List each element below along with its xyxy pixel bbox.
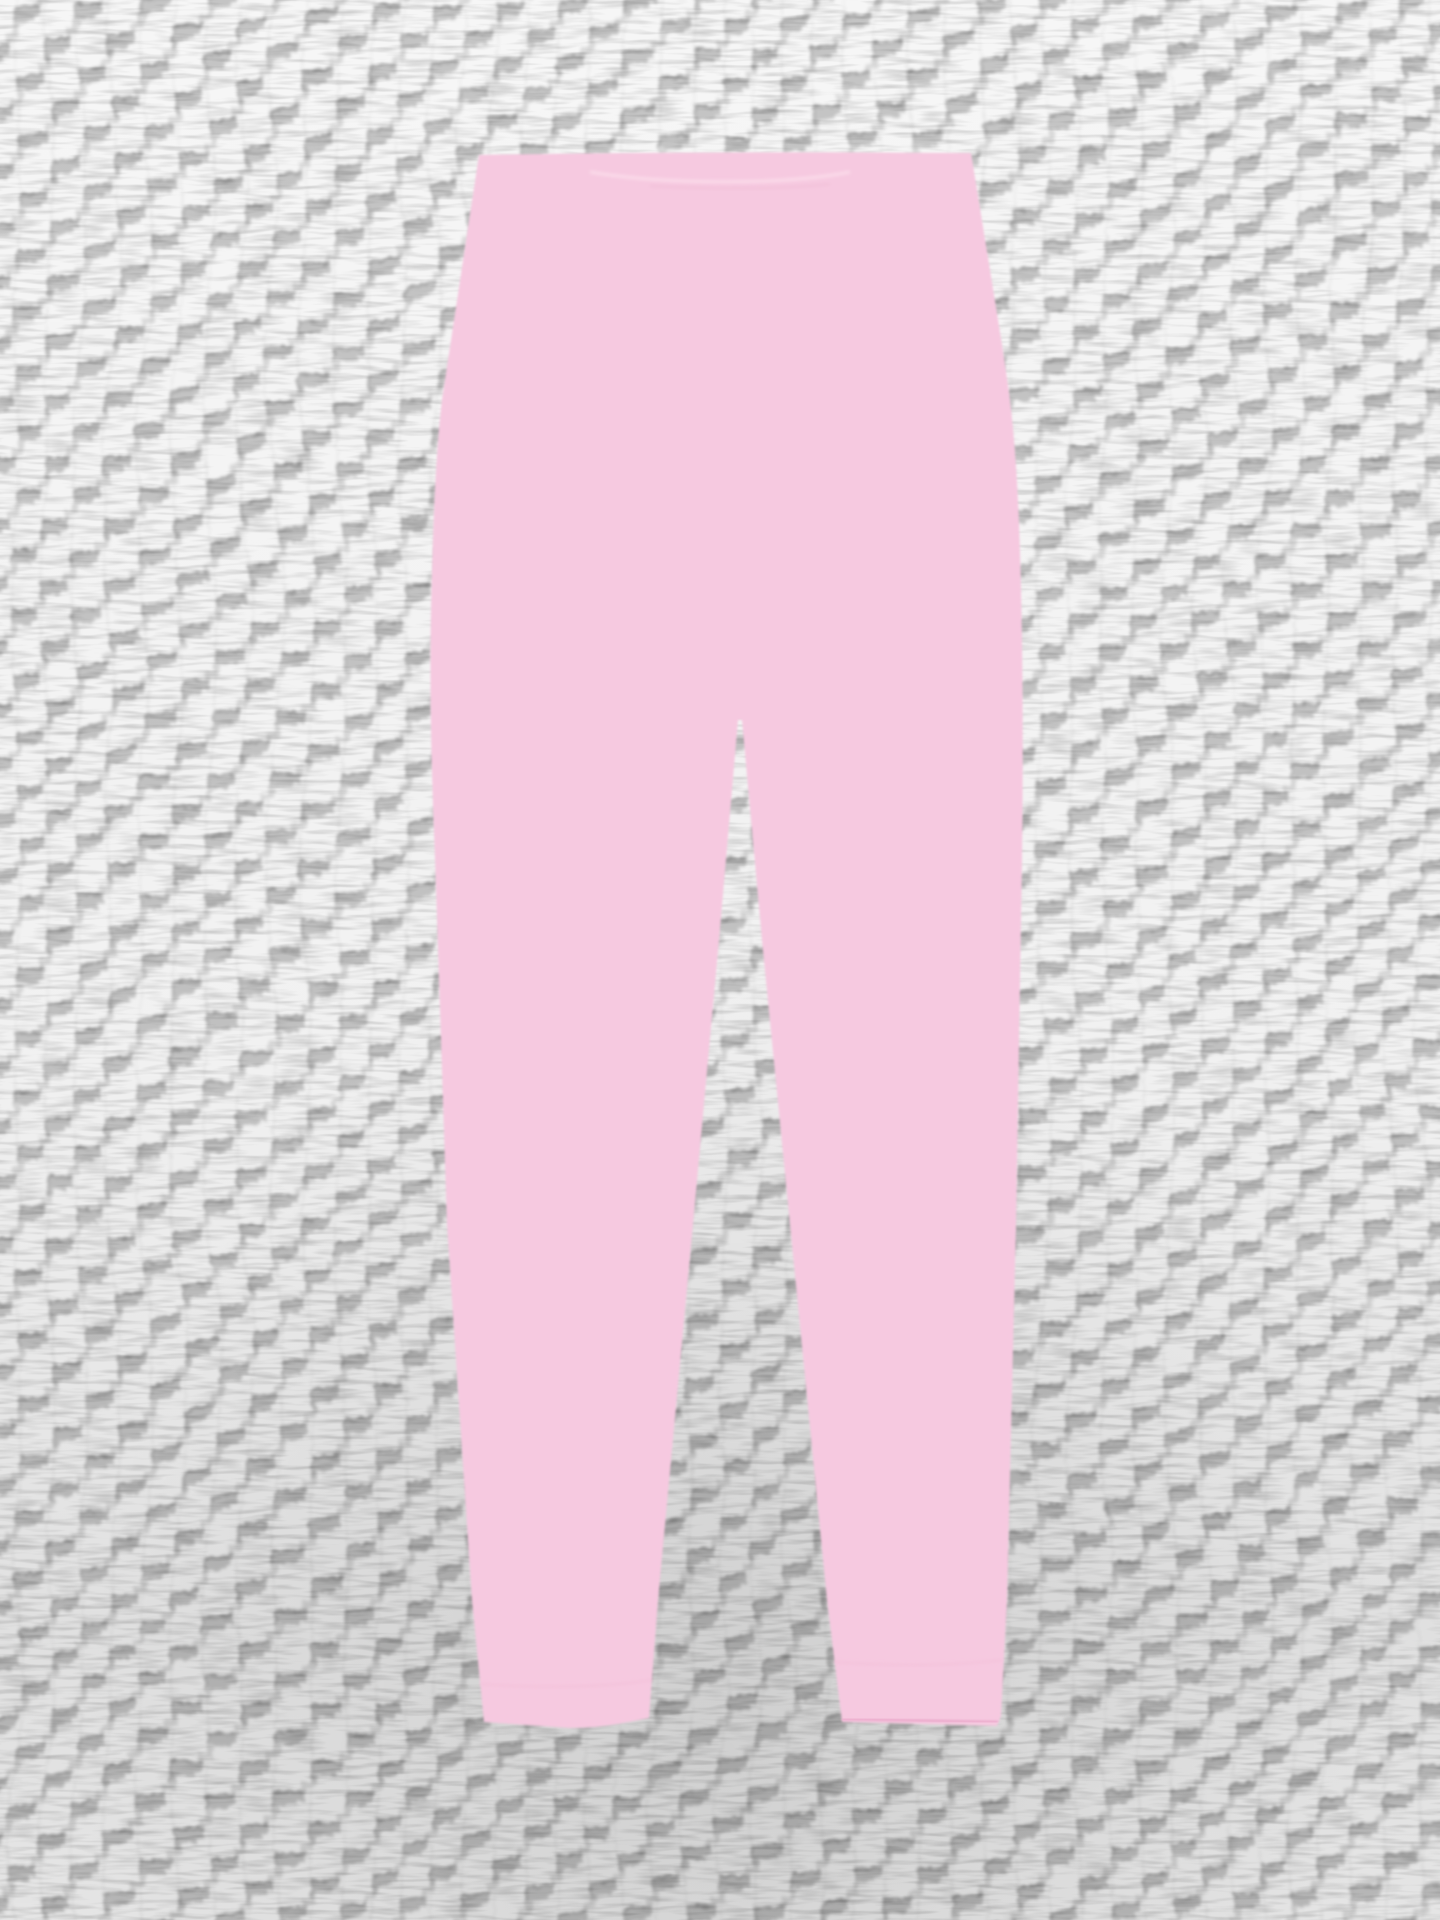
- right cuff hem: [842, 1719, 998, 1722]
- centre front seam: [737, 200, 739, 720]
- leggings silhouette: [430, 152, 1023, 1728]
- right cuff stitching: [834, 1660, 1002, 1665]
- waistband stitch line: [650, 184, 830, 188]
- left cuff stitching: [480, 1680, 652, 1687]
- leggings garment: [430, 152, 1023, 1728]
- waistband seam: [590, 172, 850, 182]
